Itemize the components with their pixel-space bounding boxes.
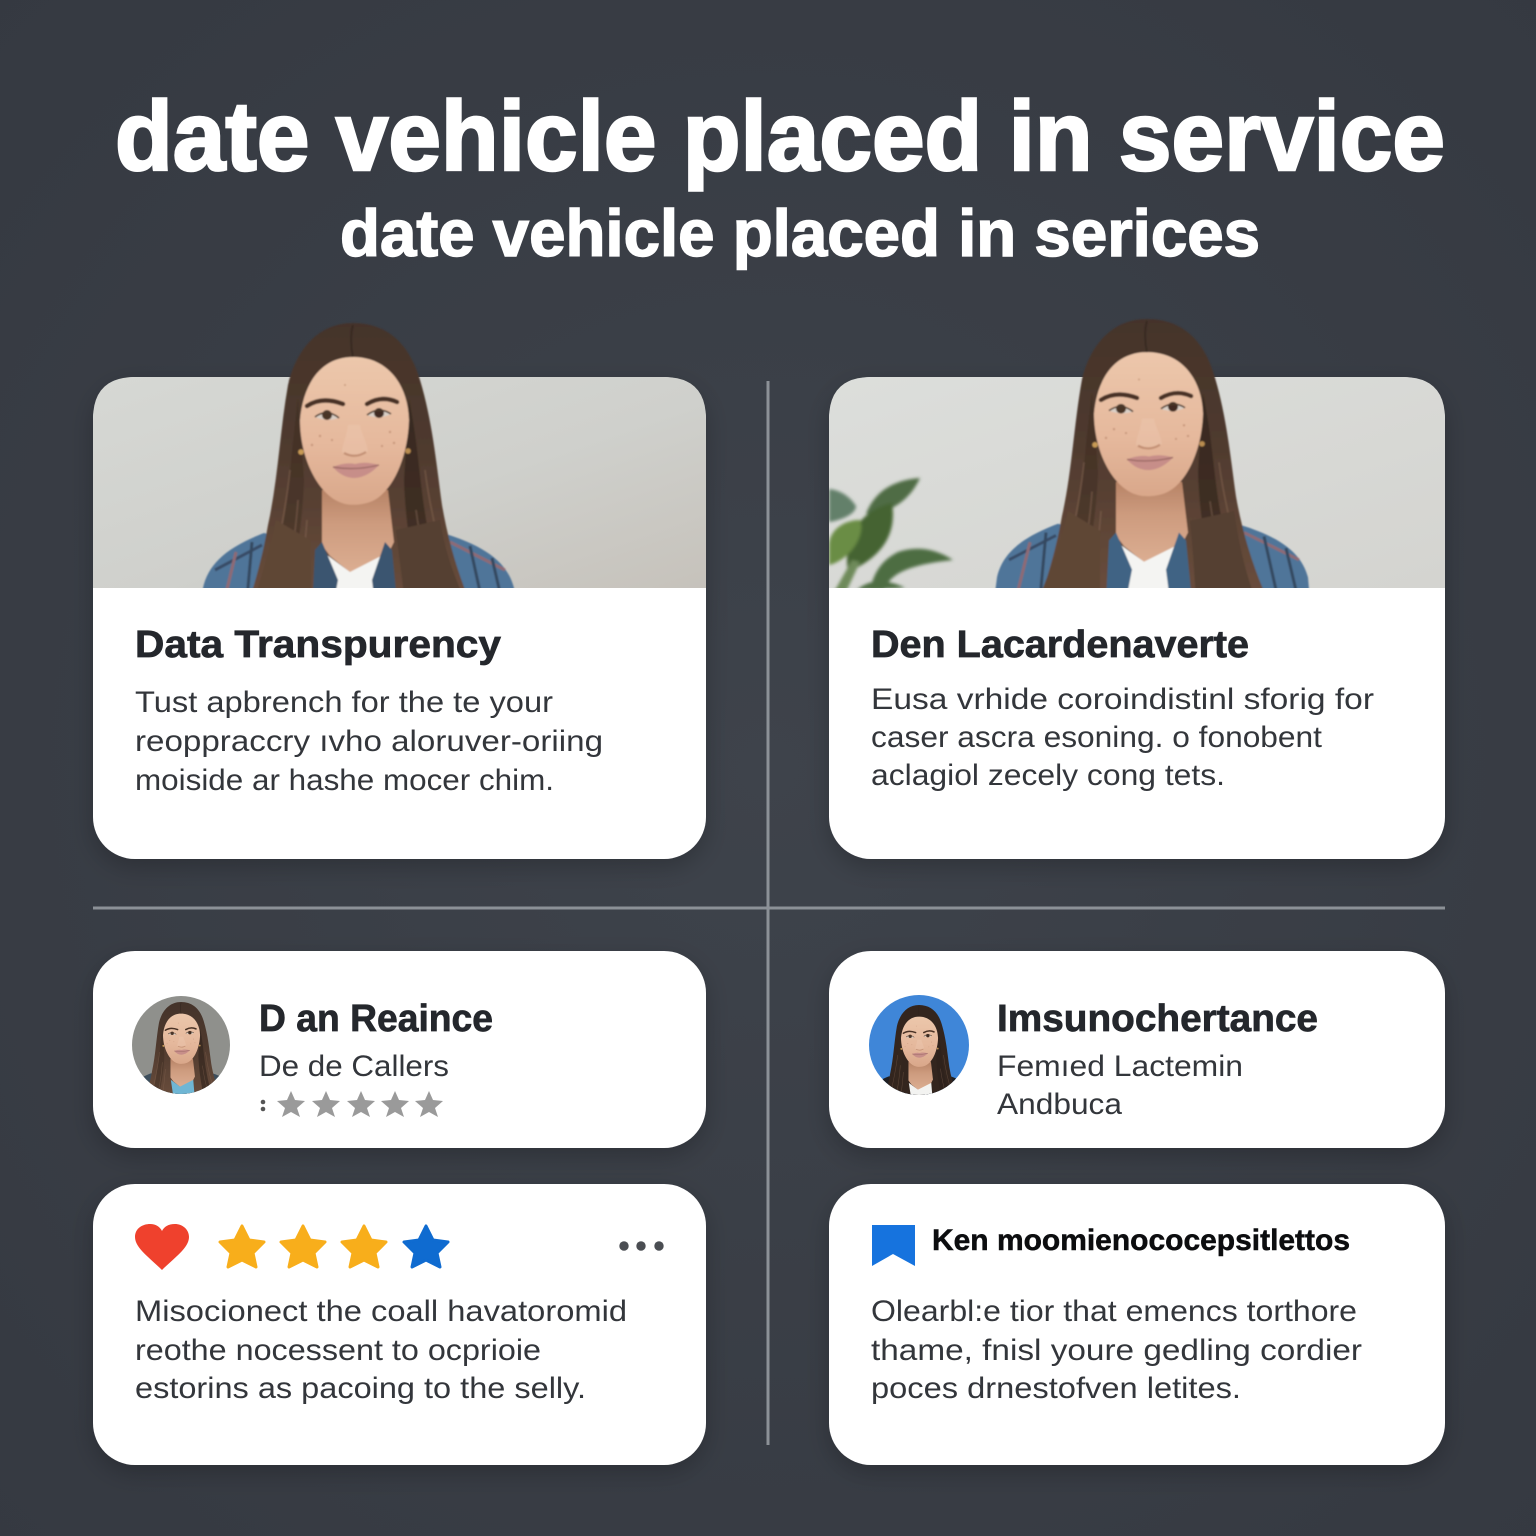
heading: Den Lacardenaverte bbox=[871, 624, 1249, 666]
panel: Data Transpurency card bbox=[93, 323, 706, 859]
role bbox=[997, 1050, 1243, 1121]
icon: more dots bbox=[619, 1241, 664, 1251]
panel: rating review card bbox=[93, 1184, 706, 1465]
body text: Tust apbrench for the te your bbox=[135, 686, 553, 719]
body text: moiside ar hashe mocer chim. bbox=[135, 764, 554, 797]
icon: blue star bbox=[404, 1226, 448, 1267]
title: date vehicle placed in service bbox=[115, 81, 1445, 191]
body text bbox=[871, 1295, 1362, 1405]
photo background bbox=[829, 377, 1445, 588]
body text: aclagiol zecely cong tets. bbox=[871, 759, 1225, 792]
name: D an Reaince bbox=[259, 998, 493, 1040]
avatar bbox=[869, 995, 969, 1095]
body text bbox=[871, 683, 1374, 792]
role: Femıed Lactemin bbox=[997, 1050, 1243, 1083]
body text bbox=[135, 1295, 627, 1405]
panel: Imsunochertance profile card bbox=[829, 951, 1445, 1148]
body text: reoppraccry ıvho aloruver-oriing bbox=[135, 725, 603, 758]
photo background bbox=[93, 377, 706, 588]
heading: Data Transpurency bbox=[135, 624, 501, 666]
rating dots bbox=[261, 1100, 265, 1111]
body text: Eusa vrhide coroindistinl sforig for bbox=[871, 683, 1374, 716]
name: Imsunochertance bbox=[997, 998, 1318, 1040]
panel: Dan Reaince profile card bbox=[93, 951, 706, 1148]
heading: Ken moomienococepsitlettos bbox=[932, 1224, 1350, 1257]
portrait photo bbox=[200, 323, 516, 612]
body text bbox=[135, 686, 603, 797]
body text: Misocionect the coall havatoromid bbox=[135, 1295, 627, 1328]
icon: gold stars bbox=[220, 1226, 386, 1267]
body text: caser ascra esoning. o fonobent bbox=[871, 721, 1323, 754]
body text: estorins as pacoing to the selly. bbox=[135, 1372, 586, 1405]
plant bbox=[829, 478, 953, 592]
avatar bbox=[132, 996, 230, 1094]
subtitle: date vehicle placed in serices bbox=[340, 196, 1260, 270]
body text: Olearbl:e tior that emencs torthore bbox=[871, 1295, 1357, 1328]
icon: heart bbox=[135, 1224, 189, 1270]
body text: reothe nocessent to ocprioie bbox=[135, 1334, 541, 1367]
portrait photo bbox=[994, 319, 1310, 601]
panel: Den Lacardenaverte card bbox=[829, 319, 1445, 859]
body text: thame, fnisl youre gedling cordier bbox=[871, 1334, 1362, 1367]
role: De de Callers bbox=[259, 1050, 449, 1083]
panel: bookmark card bbox=[829, 1184, 1445, 1465]
grey rating stars bbox=[277, 1091, 443, 1117]
body text: poces drnestofven letites. bbox=[871, 1372, 1241, 1405]
icon: bookmark bbox=[872, 1225, 915, 1266]
role: Andbuca bbox=[997, 1088, 1122, 1121]
